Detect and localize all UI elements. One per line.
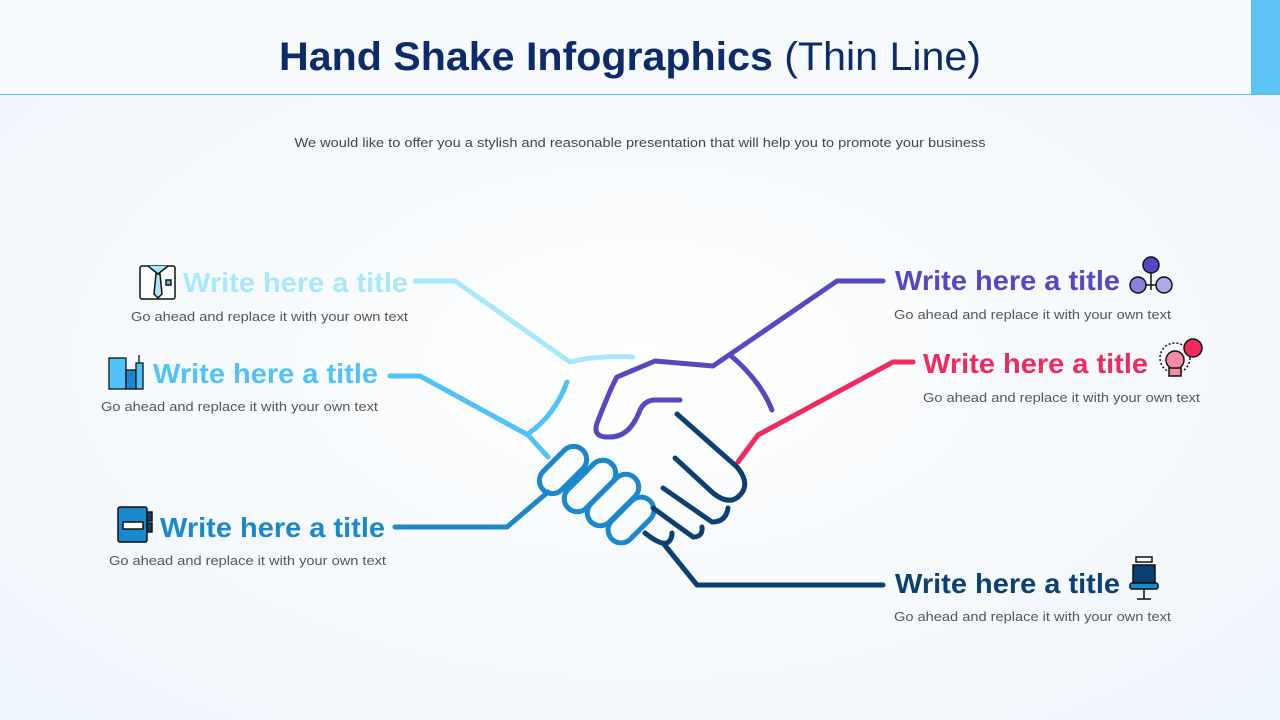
header band [0,0,1280,94]
icon: office chair [1130,557,1158,599]
item: right 3: Write here a title [895,568,1120,599]
icon: network of people [1130,257,1172,293]
item: left 1: Go ahead and replace it with your own text [131,309,408,324]
item: right 1: Go ahead and replace it with your own text [894,307,1171,322]
item: left 2 [101,355,378,414]
item: right 3 [894,557,1171,624]
connector: sky blue [390,376,567,457]
item: left 1 [131,266,408,324]
item: left 3 [109,507,386,568]
title: Hand Shake Infographics (Thin Line) [279,35,981,79]
item: right 3: Go ahead and replace it with your own text [894,609,1171,624]
item: left 1: Write here a title [183,267,408,298]
handshake illustration [390,281,913,585]
icon: book [118,507,152,542]
connector: pink [738,362,913,462]
icon: light bulb [1160,339,1202,376]
item: right 1 [894,257,1172,322]
item: right 1: Write here a title [895,265,1120,296]
item: right 2 [923,339,1202,405]
connector: light blue [415,281,633,362]
item: left 3: Go ahead and replace it with your own text [109,553,386,568]
icon: buildings [109,355,143,389]
icon: shirt and tie [140,266,175,299]
item: left 2: Go ahead and replace it with your own text [101,399,378,414]
connector: mid blue with fingers [395,441,659,548]
item: right 2: Go ahead and replace it with your own text [923,390,1200,405]
item: left 3: Write here a title [160,512,385,543]
item: left 2: Write here a title [153,358,378,389]
connector: navy hand [645,414,883,585]
subtitle: We would like to offer you a stylish and reasonable presentation that will help you to promote your business [294,135,986,150]
item: right 2: Write here a title [923,348,1148,379]
connector: purple hand [596,281,883,437]
